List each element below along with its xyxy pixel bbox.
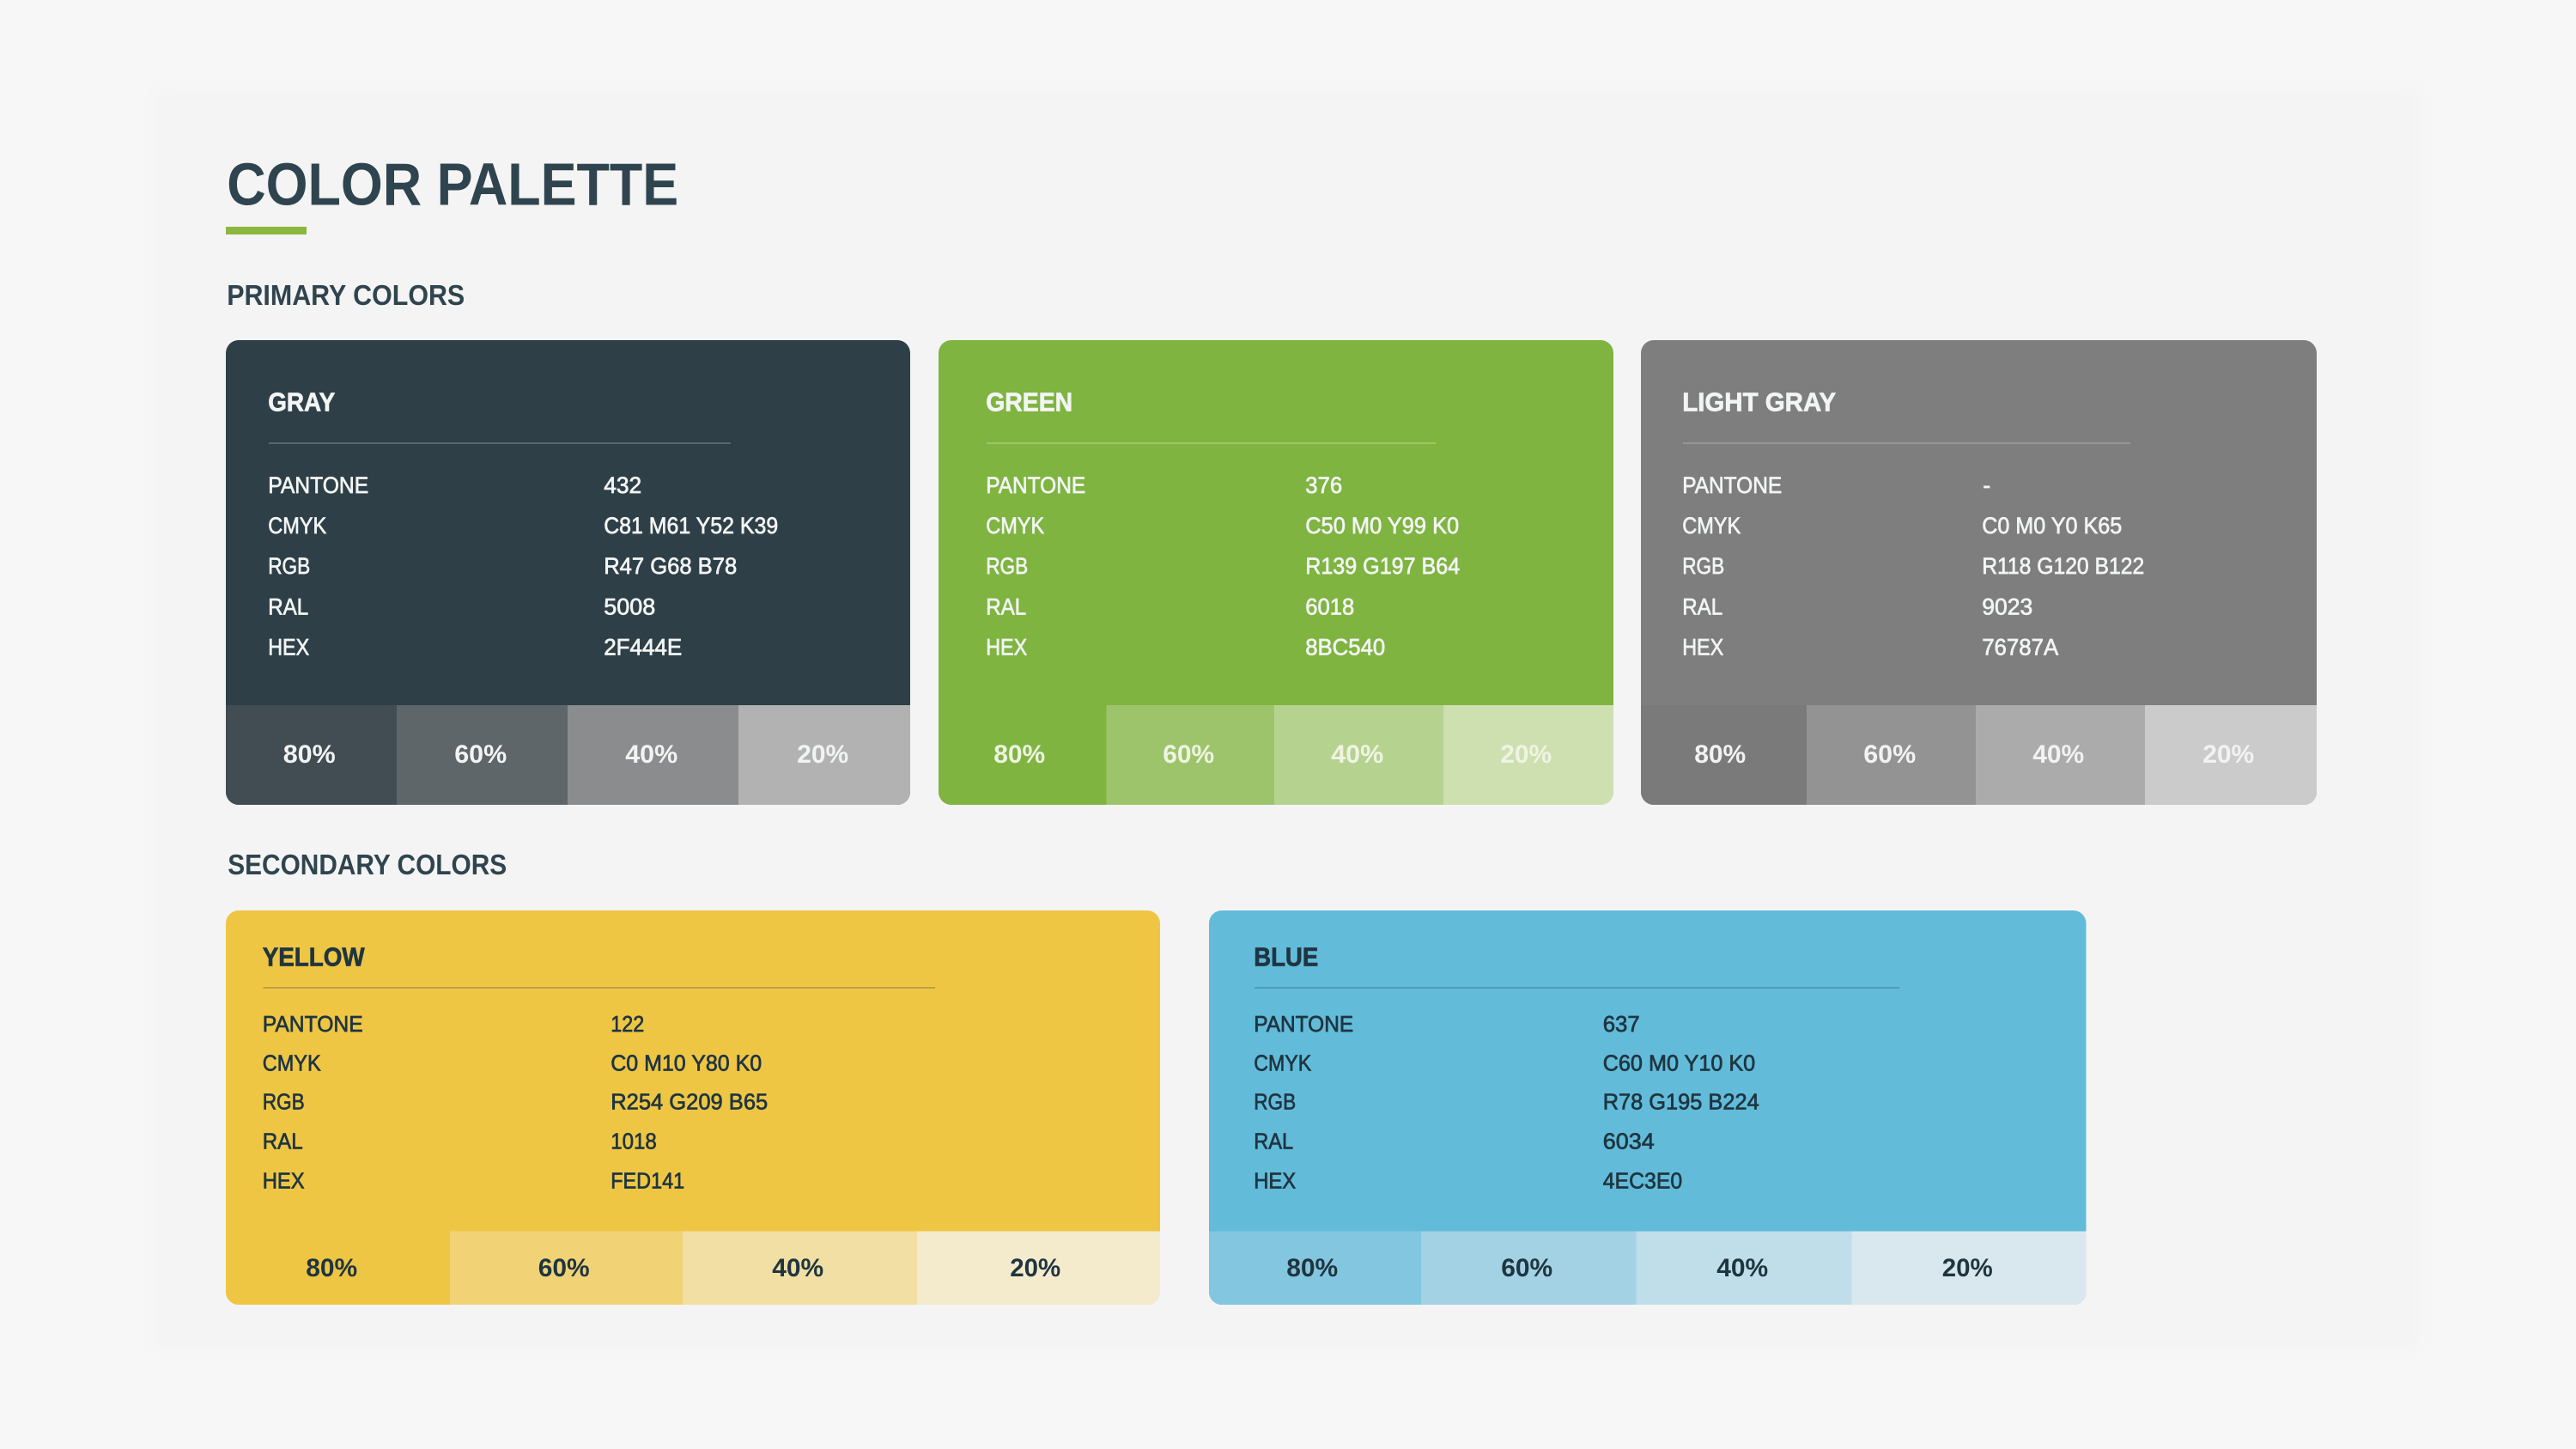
row: cmyk: C0 M0 Y0 K65 [1982,513,2122,539]
panel: yellow [226,910,1160,1305]
row: cmyk: CMYK [1682,513,1741,539]
color name: light gray: LIGHT GRAY [1682,387,1836,417]
row: pantone: PANTONE [1254,1011,1353,1037]
row: cmyk [986,513,1459,539]
row: pantone [1682,472,1990,498]
spec table: light gray [1682,472,2144,660]
tint 20% [1851,1232,2087,1305]
row: rgb: RGB [1682,553,1724,579]
tint strip: yellow [226,1232,1160,1305]
tint 60% [1421,1232,1637,1305]
row: cmyk: CMYK [268,513,326,539]
row: hex: 4EC3E0 [1603,1168,1682,1194]
tint 20% [738,705,910,805]
tint strip: light gray [1641,705,2317,805]
row: ral: RAL [263,1129,303,1154]
row: rgb: RGB [268,553,310,579]
row: hex [1682,634,2058,660]
tint 80%: 80% [306,1254,357,1282]
tint 60% [1106,705,1274,805]
row: rgb [263,1089,768,1115]
tint 40% [568,705,738,805]
tint 80%: 80% [993,740,1045,769]
row: rgb: R47 G68 B78 [604,553,737,579]
row: hex [268,634,682,660]
row: pantone: PANTONE [268,472,368,498]
row: hex: FED141 [611,1168,684,1194]
tint 20%: 20% [2202,740,2254,769]
row: hex [986,634,1385,660]
row: ral [1254,1129,1655,1154]
row: ral: RAL [268,594,308,620]
tint strip: blue [1209,1232,2087,1305]
row: ral [268,594,655,620]
tint 80% [226,705,397,805]
row: pantone: PANTONE [986,472,1085,498]
tint 60%: 60% [1501,1254,1552,1282]
tint 40%: 40% [772,1254,823,1282]
row: pantone: 432 [604,472,641,498]
tint 80% [1641,745,1745,805]
spec table: yellow [263,1011,768,1194]
spec table: blue [1254,1011,1759,1194]
row: pantone: 122 [611,1011,644,1037]
panel: blue [1209,910,2087,1305]
row: hex [263,1168,684,1194]
row: pantone: PANTONE [1682,472,1782,498]
row: cmyk: CMYK [986,513,1044,539]
row: cmyk: C0 M10 Y80 K0 [611,1050,762,1075]
row: rgb [1254,1089,1759,1115]
row: rgb [268,553,737,579]
color name: yellow: YELLOW [263,941,365,972]
row: pantone: PANTONE [263,1011,363,1037]
row: pantone [1254,1011,1640,1037]
tint 80% [939,745,1044,805]
row: hex: 2F444E [604,634,682,660]
row: ral: 6018 [1305,594,1354,620]
row: ral: 6034 [1603,1129,1655,1154]
tint 80%: 80% [283,740,336,769]
heading: primary colors: PRIMARY COLORS [227,279,465,311]
panel: gray [226,340,910,805]
tint 20% [1443,705,1613,805]
row: cmyk [263,1050,762,1075]
row: cmyk [1254,1050,1755,1075]
color name: gray: GRAY [268,387,335,417]
row: ral: 5008 [604,594,655,620]
row: ral [1682,594,2032,620]
row: rgb: R254 G209 B65 [611,1089,768,1115]
tint 60% [450,1232,683,1305]
row: hex: HEX [268,634,309,660]
row: hex: HEX [986,634,1027,660]
row: rgb: R118 G120 B122 [1982,553,2144,579]
color name: green: GREEN [986,387,1072,417]
panel: light gray [1641,340,2317,805]
tint 60%: 60% [454,740,507,769]
tint 20% [2145,705,2317,805]
row: pantone [986,472,1342,498]
row: rgb [1682,553,2144,579]
row: hex: HEX [263,1168,305,1194]
tint 60% [397,705,568,805]
row: ral: RAL [1254,1129,1293,1154]
spec table: gray [268,472,778,660]
tint 20%: 20% [1010,1254,1060,1282]
row: cmyk: CMYK [263,1050,321,1075]
tint 80%: 80% [1286,1254,1338,1282]
tint 80% [1209,1232,1421,1305]
tint strip: green [939,705,1613,805]
tint 40%: 40% [2032,740,2084,769]
row: ral: 1018 [611,1129,657,1154]
title: COLOR PALETTE [227,151,678,218]
row: cmyk: C81 M61 Y52 K39 [604,513,778,539]
row: pantone [263,1011,644,1037]
row: rgb: RGB [1254,1089,1296,1115]
tint 20% [917,1232,1160,1305]
row: pantone: 376 [1305,472,1342,498]
row: rgb: R78 G195 B224 [1603,1089,1759,1115]
tint 40% [683,1232,917,1305]
tint 20%: 20% [1500,740,1552,769]
row: ral [263,1129,657,1154]
row: hex: HEX [1682,634,1723,660]
tint 60%: 60% [1863,740,1916,769]
row: cmyk: C60 M0 Y10 K0 [1603,1050,1755,1075]
row: ral: 9023 [1982,594,2032,620]
row: pantone [268,472,641,498]
tint 40%: 40% [625,740,677,769]
row: rgb: RGB [986,553,1028,579]
tint 80% [226,1258,357,1305]
tint 60% [1807,705,1976,805]
row: cmyk [268,513,778,539]
row: hex: 8BC540 [1305,634,1385,660]
row: rgb: R139 G197 B64 [1305,553,1460,579]
row: ral: RAL [1682,594,1722,620]
title underline accent [226,227,307,234]
tint strip: gray [226,705,910,805]
row: cmyk: CMYK [1254,1050,1312,1075]
row: pantone: - [1983,472,1990,498]
row: rgb [986,553,1460,579]
row: hex: HEX [1254,1168,1296,1194]
tint 20%: 20% [1942,1254,1993,1282]
row: cmyk: C50 M0 Y99 K0 [1305,513,1459,539]
panel: green [939,340,1613,805]
tint 60%: 60% [1163,740,1214,769]
tint 40% [1976,705,2145,805]
tint 20%: 20% [797,740,848,769]
tint 40% [1637,1232,1851,1305]
row: rgb: RGB [263,1089,305,1115]
row: cmyk [1682,513,2122,539]
tint 40% [1274,705,1443,805]
row: ral: RAL [986,594,1026,620]
color name: blue: BLUE [1254,941,1318,972]
spec table: green [986,472,1460,660]
tint 60%: 60% [538,1254,590,1282]
row: ral [986,594,1354,620]
tint 40%: 40% [1716,1254,1768,1282]
row: hex [1254,1168,1682,1194]
tint 40%: 40% [1331,740,1383,769]
row: pantone: 637 [1603,1011,1640,1037]
row: hex: 76787A [1982,634,2058,660]
heading: secondary colors: SECONDARY COLORS [228,849,507,880]
tint 80%: 80% [1694,740,1746,769]
